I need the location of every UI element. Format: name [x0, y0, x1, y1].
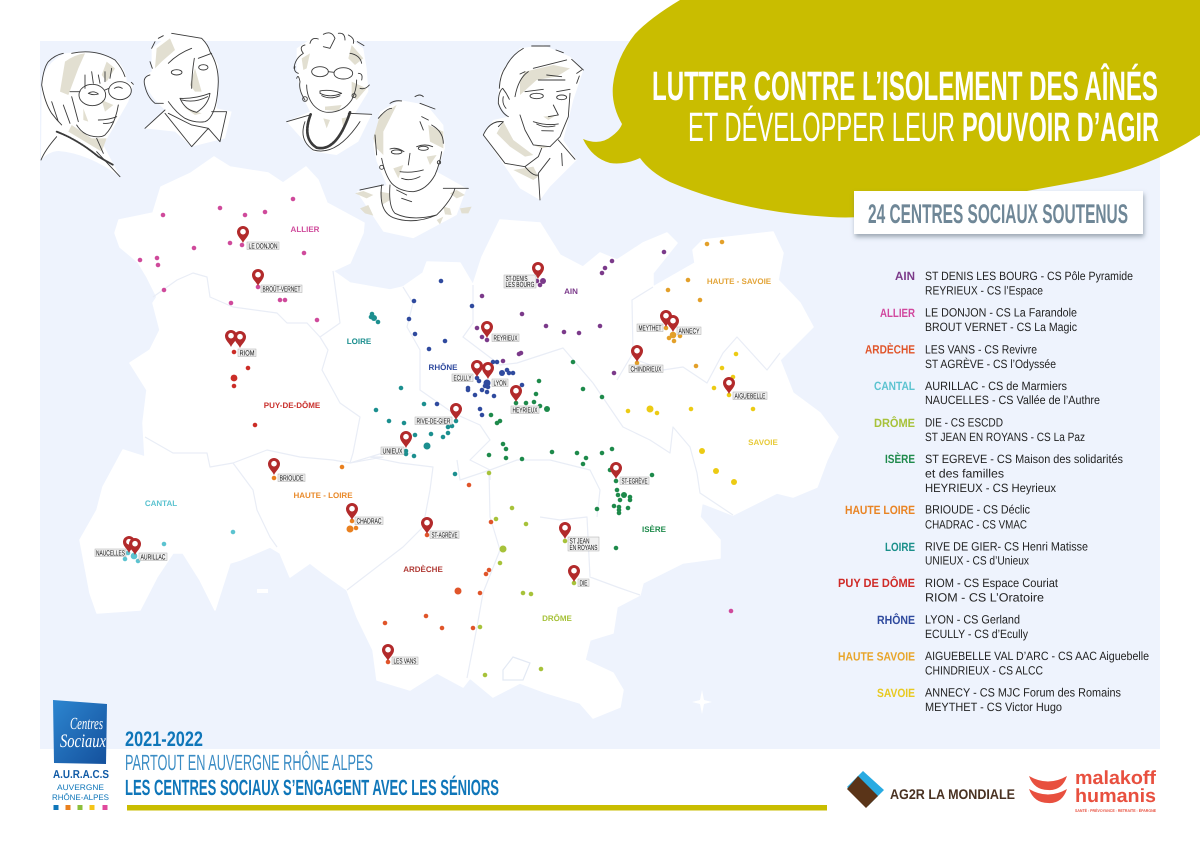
list: Cantal: NAUCELLES - CS Vallée de l’Authre: [925, 393, 1100, 407]
pin: Heyrieux: [510, 385, 539, 414]
list: Isère: ST EGREVE - CS Maison des solidarités: [925, 452, 1123, 466]
list: Ardèche: [865, 342, 1056, 371]
dots: Drôme: [480, 473, 574, 675]
pin: Broût-Vernet: BROÛT-VERNET: [262, 284, 301, 294]
pin: Naucelles: [95, 536, 135, 558]
dots: Ain: [477, 252, 664, 373]
pin: Le Donjon: LE DONJON: [248, 242, 278, 250]
dots: Haute-Loire: [274, 467, 356, 532]
region label: Haute-Savoie: HAUTE - SAVOIE: [707, 277, 772, 286]
list: Loire: RIVE DE GIER- CS Henri Matisse: [925, 540, 1088, 554]
list of departments and centres: [838, 269, 1149, 714]
list: Savoie: ANNECY - CS MJC Forum des Romains: [925, 686, 1121, 700]
list: Drôme: DRÔME: [874, 416, 915, 430]
list: Haute Loire: [845, 502, 1030, 532]
logo: Centres Sociaux AURACS: [52, 700, 109, 810]
list: Haute Loire: HAUTE LOIRE: [845, 503, 915, 517]
list: Rhône: RHÔNE: [877, 613, 915, 627]
pin: Aiguebelle: AIGUEBELLE: [734, 392, 766, 400]
pin: Reyrieux: REYRIEUX: [494, 334, 518, 342]
pin: Broût-Vernet: [252, 269, 302, 294]
pin: Heyrieux: HEYRIEUX: [512, 406, 538, 414]
region outline: [80, 157, 838, 718]
list: Ain: [895, 269, 1133, 298]
region label: Rhône: RHÔNE: [429, 362, 458, 372]
portrait: man with open collar: [483, 45, 583, 200]
list: Drôme: ST JEAN EN ROYANS - CS La Paz: [925, 430, 1085, 444]
list: Rhône: LYON - CS Gerland: [925, 612, 1020, 626]
pin: Ecully: ECULLY: [454, 374, 472, 382]
pin: Chindrieux: [629, 345, 663, 374]
region label: Allier: ALLIER: [291, 225, 320, 234]
list: Allier: [880, 306, 1077, 334]
pin: Chadrac: [346, 503, 383, 526]
list: Rhône: ECULLY - CS d’Ecully: [925, 627, 1028, 641]
list: Isère: et des familles: [925, 466, 1004, 480]
dots: Rhône: [409, 281, 522, 415]
pin: Brioude: BRIOUDE: [280, 474, 304, 482]
list: Loire: [885, 540, 1088, 568]
dots: Savoie: [628, 354, 753, 485]
pin: St-Denis-lès-Bourg: LES BOURG: [506, 280, 535, 289]
portrait: smiling woman with short hair: [355, 95, 472, 238]
region label: Isère: ISÈRE: [642, 524, 667, 534]
list: Allier: BROUT VERNET - CS La Magic: [925, 320, 1077, 334]
list: Puy de Dôme: [838, 576, 1059, 604]
list: Ardèche: LES VANS - CS Revivre: [925, 342, 1037, 356]
speech bubble: [583, 0, 1200, 217]
pin: Rive-de-Gier: [415, 403, 462, 426]
pin: Naucelles: NAUCELLES: [96, 548, 125, 558]
count banner: [854, 191, 1143, 234]
list: Ain: ST DENIS LES BOURG - CS Pôle Pyramide: [925, 269, 1133, 283]
pin: Annecy: ANNECY: [678, 326, 700, 336]
pin: Les Vans: [382, 644, 418, 666]
pin: Aurillac: [129, 538, 167, 562]
pin: Meythet: MEYTHET: [638, 324, 662, 332]
list: Allier: ALLIER: [880, 306, 915, 320]
list: Puy de Dôme: RIOM - CS Espace Couriat: [925, 576, 1059, 590]
pin: Unieux: UNIEUX: [382, 446, 402, 456]
pin: Chindrieux: CHINDRIEUX: [630, 364, 662, 374]
region label: Loire: LOIRE: [347, 337, 372, 346]
list: Puy de Dôme: RIOM - CS L’Oratoire: [925, 590, 1044, 604]
list: Isère: ISÈRE: [885, 452, 915, 466]
footer year: 2021-2022: [125, 728, 203, 751]
pin: Aiguebelle: [723, 377, 767, 400]
department borders: [145, 271, 780, 678]
logo: AG2R La Mondiale: AG2R LA MONDIALE: [890, 786, 1015, 802]
portrait: woman with glasses and pearls: [41, 52, 133, 177]
list: Ardèche: ST AGRÈVE - CS l’Odyssée: [925, 357, 1056, 371]
pin: Meythet: [637, 310, 672, 332]
list: Loire: LOIRE: [885, 540, 915, 554]
background panel: [40, 41, 1160, 749]
footer rule: [127, 805, 827, 810]
list: Savoie: MEYTHET - CS Victor Hugo: [925, 700, 1062, 714]
pin: Annecy: [667, 315, 701, 336]
logo: Malakoff Humanis: [1029, 768, 1157, 813]
dots: Puy-de-Dôme: [231, 352, 255, 425]
list: Rhône: [877, 612, 1028, 641]
dots: Ardèche: [385, 485, 491, 662]
logo: Centres Sociaux AURACS: Centres: [70, 714, 103, 733]
list: Ain: REYRIEUX - CS l’Espace: [925, 284, 1043, 298]
pin: St-Denis-lès-Bourg: ST-DENIS: [506, 274, 528, 283]
list: Haute Savoie: CHINDRIEUX - CS ALCC: [925, 664, 1043, 678]
pin: Die: [568, 565, 589, 588]
pin: St Jean en Royans: EN ROYANS: [570, 543, 598, 552]
region label: Cantal: CANTAL: [145, 499, 177, 508]
sparkle and island marks: [257, 589, 712, 714]
pin: Unieux: [381, 431, 412, 456]
dots: Haute-Savoie: [637, 242, 722, 366]
pin: Reyrieux: [481, 321, 519, 342]
list: Ardèche: ARDÈCHE: [865, 342, 915, 356]
list: Puy de Dôme: PUY DE DÔME: [838, 576, 915, 590]
pin: St-Agrève: [421, 517, 459, 540]
pin: St-Egrève: [610, 462, 649, 486]
pin: Lyon: LYON: [494, 378, 506, 388]
pin: Brioude: [268, 458, 305, 482]
dots: Cantal: [125, 532, 233, 561]
region label: Ardèche: ARDÈCHE: [403, 564, 443, 574]
pin: Ecully: [452, 360, 483, 382]
region label: Savoie: SAVOIE: [748, 438, 778, 447]
pin: Le Donjon: [237, 226, 279, 250]
region label: Puy-de-Dôme: PUY-DE-DÔME: [264, 400, 321, 410]
logo: Centres Sociaux AURACS: AUVERGNE: [57, 783, 104, 792]
portrait: smiling bald man: [144, 33, 232, 147]
dots: Allier: [140, 199, 731, 611]
bubble title line 2: ET DÉVELOPPER LEUR: [688, 104, 955, 150]
list: Isère: [885, 452, 1123, 495]
list: Cantal: AURILLAC - CS de Marmiers: [925, 379, 1067, 393]
pin: Rive-de-Gier: RIVE-DE-GIER: [416, 416, 451, 426]
pin: Die: DIE: [580, 578, 588, 588]
list: Haute Loire: CHADRAC - CS VMAC: [925, 518, 1027, 532]
pin: St-Agrève: ST-AGRÈVE: [432, 530, 458, 540]
logo: Malakoff Humanis: malakoff: [1075, 768, 1157, 789]
region label: Haute-Loire: HAUTE - LOIRE: [293, 491, 353, 500]
portrait: curly-haired woman with necklace: [287, 33, 372, 155]
list: Haute Savoie: [838, 649, 1149, 678]
list: Allier: LE DONJON - CS La Farandole: [925, 306, 1077, 320]
pins: Riom: RIOM: [240, 348, 254, 358]
list: Cantal: [874, 379, 1100, 407]
list: Cantal: CANTAL: [874, 379, 915, 393]
logo: Centres Sociaux AURACS: A.U.R.A.C.S: [53, 769, 109, 781]
pins: Riom: [225, 330, 256, 358]
logo: AG2R La Mondiale: [847, 771, 1015, 808]
pin: Lyon: [482, 362, 508, 388]
region label: Drôme: DRÔME: [542, 613, 573, 623]
pin: St-Egrève: ST-EGRÈVE: [622, 476, 648, 486]
pin: Les Vans: LES VANS: [394, 656, 416, 666]
list: Savoie: [877, 686, 1121, 714]
pin: Chadrac: CHADRAC: [356, 516, 382, 526]
list: Savoie: SAVOIE: [877, 686, 915, 700]
logo: Malakoff Humanis: SANTÉ - PRÉVOYANCE - RETRAITE - ÉPARGNE: [1075, 808, 1156, 813]
list: Drôme: DIE - CS ESCDD: [925, 416, 1003, 430]
list: Haute Loire: BRIOUDE - CS Déclic: [925, 502, 1030, 516]
pin: St-Denis-lès-Bourg: [504, 262, 544, 289]
list: Drôme: [874, 416, 1085, 444]
footer subtitle: PARTOUT EN AUVERGNE RHÔNE ALPES: [125, 750, 373, 775]
pin: Aurillac: AURILLAC: [140, 552, 166, 562]
dots: Isère: [489, 362, 652, 548]
logo: Centres Sociaux AURACS: Sociaux: [60, 731, 106, 752]
list: Loire: UNIEUX - CS d’Unieux: [925, 554, 1029, 568]
list: Isère: HEYRIEUX - CS Heyrieux: [925, 481, 1056, 495]
list: Ain: AIN: [895, 269, 915, 283]
list: Haute Savoie: AIGUEBELLE VAL D’ARC - CS AAC Aiguebelle: [925, 649, 1149, 663]
dots: Loire: [371, 314, 456, 474]
footer headline: LES CENTRES SOCIAUX S’ENGAGENT AVEC LES SÉNIORS: [125, 775, 499, 800]
pin: St Jean en Royans: [559, 522, 599, 552]
logo: Centres Sociaux AURACS: RHÔNE-ALPES: [52, 793, 109, 802]
map of Auvergne Rhône-Alpes: [80, 157, 838, 718]
enclave outline: [503, 657, 530, 680]
list: Haute Savoie: HAUTE SAVOIE: [838, 650, 915, 664]
pin: St Jean en Royans: ST JEAN: [570, 536, 590, 546]
region label: Ain: AIN: [564, 287, 578, 296]
logo: Malakoff Humanis: humanis: [1075, 786, 1156, 807]
